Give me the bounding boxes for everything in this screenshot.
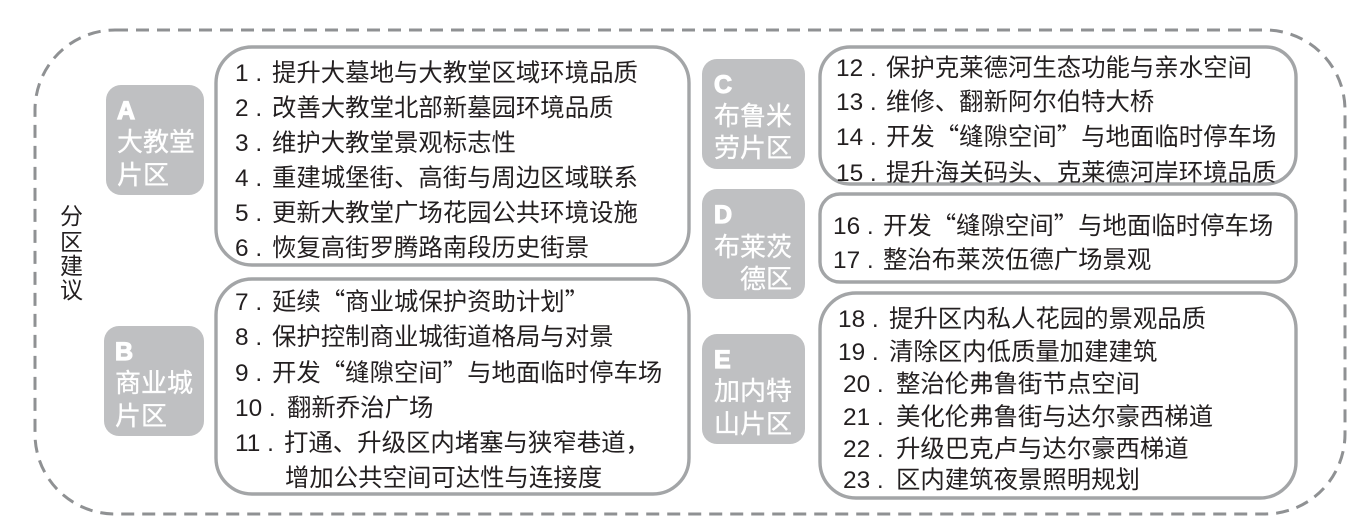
panel: zone B list: 8 . bbox=[235, 324, 262, 351]
panel: zone C list: 维修、翻新阿尔伯特大桥 bbox=[886, 89, 1154, 116]
panel: zone E label: E bbox=[714, 346, 731, 374]
panel: zone E list: 21 . bbox=[843, 404, 884, 431]
panel: zone E list: 整治伦弗鲁街节点空间 bbox=[896, 371, 1140, 398]
panel: zone B list: 翻新乔治广场 bbox=[287, 395, 433, 422]
panel: zone E list bbox=[820, 293, 1296, 498]
panel: zone A list: 1 . bbox=[235, 60, 262, 87]
panel: zone A list: 5 . bbox=[235, 200, 262, 227]
panel: zone C list: 12 . bbox=[836, 55, 877, 82]
vertical label: 议 bbox=[60, 277, 83, 303]
panel: zone E list: 23 . bbox=[843, 467, 884, 494]
panel: zone D label: 布莱茨 bbox=[714, 232, 792, 262]
panel: zone C list: 14 . bbox=[836, 124, 877, 151]
panel: zone E list: 提升区内私人花园的景观品质 bbox=[889, 306, 1206, 333]
panel: zone E list: 升级巴克卢与达尔豪西梯道 bbox=[896, 436, 1189, 463]
panel: zone B label bbox=[104, 326, 204, 436]
panel: zone B label: B bbox=[115, 338, 133, 366]
panel: zone A list: 改善大教堂北部新墓园环境品质 bbox=[272, 95, 613, 122]
panel: zone D list: 整治布莱茨伍德广场景观 bbox=[883, 247, 1151, 274]
panel: zone E list: 美化伦弗鲁街与达尔豪西梯道 bbox=[896, 404, 1213, 431]
vertical label: 建 bbox=[60, 253, 83, 279]
panel: zone A label bbox=[106, 85, 204, 195]
panel: zone A label: 大教堂 bbox=[117, 127, 195, 157]
panel: zone A list: 4 . bbox=[235, 165, 262, 192]
panel: zone E label: 山片区 bbox=[714, 409, 792, 439]
panel: zone D list: 开发“缝隙空间”与地面临时停车场 bbox=[883, 207, 1273, 242]
panel: zone B list: 打通、升级区内堵塞与狭窄巷道， bbox=[284, 424, 650, 459]
panel: zone D list bbox=[820, 194, 1296, 282]
panel: zone A list: 2 . bbox=[235, 95, 262, 122]
panel: zone C label: 布鲁米 bbox=[714, 101, 792, 131]
panel: zone C label bbox=[702, 59, 805, 169]
panel: zone B list: 开发“缝隙空间”与地面临时停车场 bbox=[272, 354, 662, 389]
panel: zone B list: 延续“商业城保护资助计划” bbox=[272, 283, 589, 318]
panel: zone E list: 18 . bbox=[838, 306, 879, 333]
panel: zone B label: 片区 bbox=[115, 401, 167, 431]
panel: zone B list: 7 . bbox=[235, 289, 262, 316]
panel: zone C list: 13 . bbox=[836, 89, 877, 116]
panel: zone D label: D bbox=[714, 201, 732, 229]
panel: zone E list: 19 . bbox=[838, 339, 879, 366]
panel: zone E list: 20 . bbox=[843, 371, 884, 398]
panel: zone A list: 6 . bbox=[235, 235, 262, 262]
panel: zone E label bbox=[702, 334, 805, 444]
panel: zone B list: 11 . bbox=[235, 430, 274, 457]
panel: zone D list: 16 . bbox=[833, 213, 874, 240]
panel: zone A label: 片区 bbox=[117, 160, 169, 190]
panel: zone B list: 保护控制商业城街道格局与对景 bbox=[272, 324, 613, 351]
panel: zone C list: 保护克莱德河生态功能与亲水空间 bbox=[886, 55, 1252, 82]
panel: zone E list: 区内建筑夜景照明规划 bbox=[896, 467, 1140, 494]
panel: zone C label: C bbox=[714, 71, 732, 99]
panel: zone A list: 恢复高街罗腾路南段历史街景 bbox=[272, 235, 589, 262]
panel: zone A label: A bbox=[117, 97, 135, 125]
panel: zone D label bbox=[702, 189, 805, 299]
panel: zone A list: 提升大墓地与大教堂区域环境品质 bbox=[272, 60, 638, 87]
panel: zone A list: 重建城堡街、高街与周边区域联系 bbox=[272, 165, 638, 192]
vertical label: 区 bbox=[60, 229, 83, 255]
panel: zone B list: 10 . bbox=[235, 395, 276, 422]
panel: zone B list: 增加公共空间可达性与连接度 bbox=[285, 465, 602, 492]
vertical label: 分 bbox=[60, 203, 83, 229]
panel: zone C list: 15 . bbox=[836, 160, 877, 187]
panel: zone A list: 3 . bbox=[235, 130, 262, 157]
panel: zone C list: 提升海关码头、克莱德河岸环境品质 bbox=[886, 160, 1276, 187]
panel: zone E list: 22 . bbox=[843, 436, 884, 463]
panel: zone D label: 德区 bbox=[740, 264, 792, 294]
panel: zone A list: 维护大教堂景观标志性 bbox=[272, 130, 516, 157]
panel: zone B list bbox=[216, 279, 689, 494]
panel: zone C list bbox=[820, 47, 1296, 187]
panel: zone D list: 17 . bbox=[833, 247, 874, 274]
panel: zone C label: 劳片区 bbox=[714, 133, 792, 163]
panel: zone A list: 更新大教堂广场花园公共环境设施 bbox=[272, 200, 638, 227]
panel: zone C list: 开发“缝隙空间”与地面临时停车场 bbox=[886, 118, 1276, 153]
panel: zone E label: 加内特 bbox=[714, 376, 792, 406]
panel: zone B list: 9 . bbox=[235, 360, 262, 387]
panel: zone E list: 清除区内低质量加建建筑 bbox=[889, 339, 1157, 366]
panel: zone A list bbox=[216, 47, 689, 265]
panel: zone B label: 商业城 bbox=[115, 368, 193, 398]
vertical label bbox=[60, 203, 83, 303]
